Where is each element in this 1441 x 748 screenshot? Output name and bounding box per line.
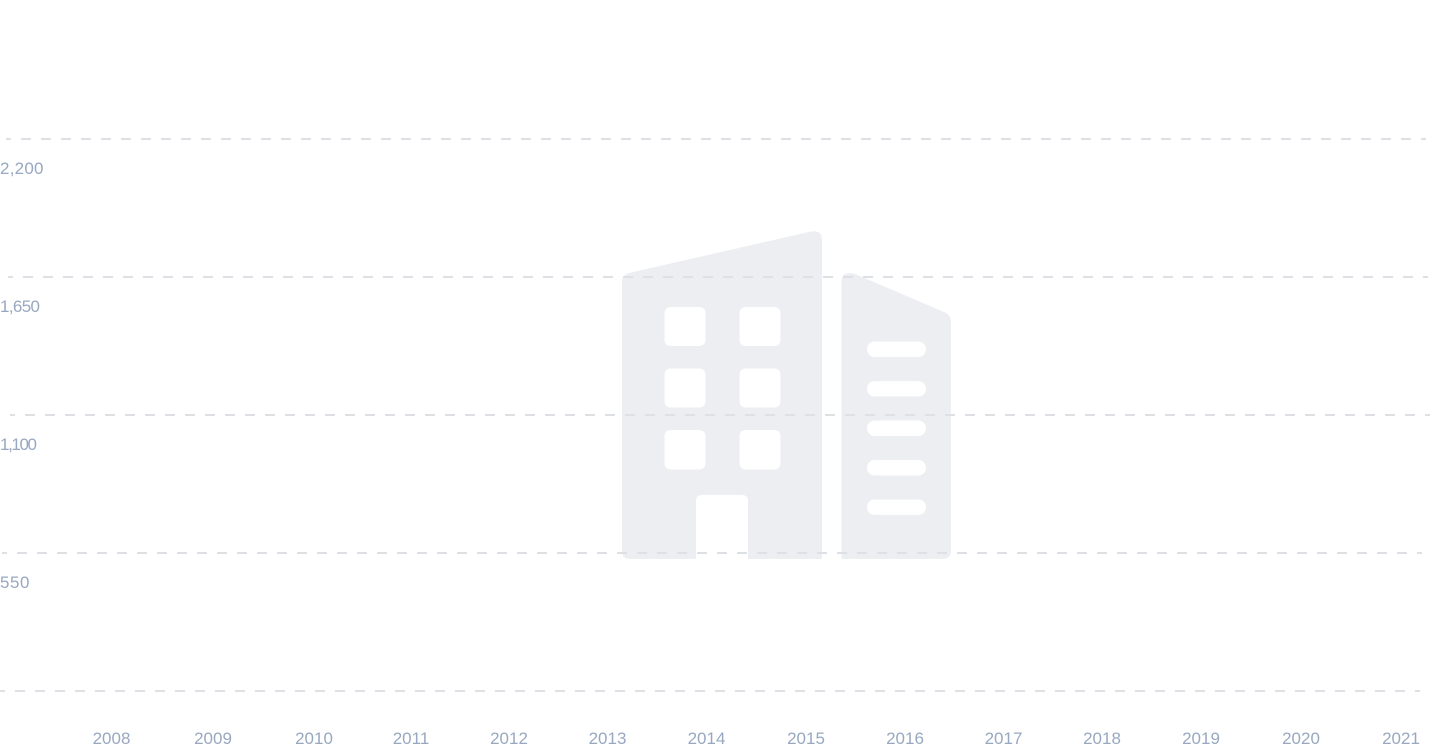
short building — [842, 273, 951, 559]
tall building door — [696, 495, 748, 559]
x-axis year labels: 2013 — [589, 729, 626, 748]
x-axis year labels: 2011 — [393, 729, 429, 748]
y-axis labels: 550 — [0, 573, 30, 592]
x-axis year labels: 2016 — [886, 729, 924, 748]
tall building — [622, 231, 822, 559]
x-axis year labels: 2021 — [1382, 729, 1420, 748]
x-axis year labels: 2010 — [295, 729, 333, 748]
x-axis year labels: 2019 — [1182, 729, 1220, 748]
x-axis year labels: 2009 — [194, 729, 232, 748]
x-axis year labels: 2017 — [985, 729, 1022, 748]
icon: office buildings watermark — [622, 231, 951, 559]
tall building windows — [664, 307, 780, 470]
y-axis labels: 2,200 — [0, 159, 44, 178]
y-axis labels: 1,650 — [0, 297, 40, 316]
x-axis year labels: 2008 — [93, 729, 130, 748]
short building window slots — [867, 342, 926, 515]
x-axis year labels: 2018 — [1083, 729, 1121, 748]
y-axis labels: 1,100 — [0, 435, 37, 454]
x-axis year labels: 2014 — [688, 729, 725, 748]
gridlines — [0, 139, 1430, 691]
x-axis year labels: 2012 — [490, 729, 528, 748]
x-axis year labels — [93, 729, 1420, 748]
x-axis year labels: 2015 — [787, 729, 825, 748]
x-axis year labels: 2020 — [1282, 729, 1320, 748]
y-axis labels — [0, 159, 44, 592]
